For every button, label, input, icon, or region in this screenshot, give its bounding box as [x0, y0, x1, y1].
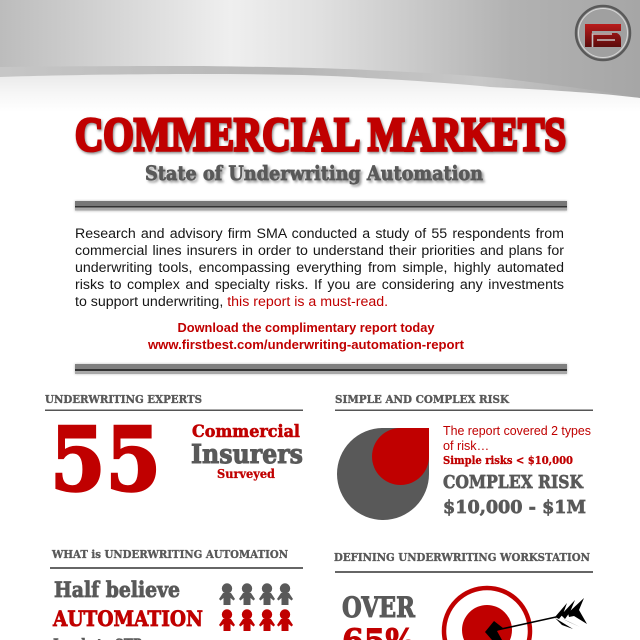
over: OVER — [342, 591, 416, 624]
risk text: $10,000 - $1M — [443, 497, 586, 518]
risk text — [443, 424, 591, 518]
subtitle: State of Underwriting Automation — [145, 161, 483, 185]
risk drop chart — [337, 428, 429, 520]
commercial insurers surveyed: Surveyed — [217, 466, 275, 481]
commercial insurers surveyed: Insurers — [191, 440, 303, 470]
icon: target with arrow — [444, 588, 587, 640]
risk text: Simple risks < $10,000 — [443, 454, 573, 467]
bottom divider — [75, 364, 567, 374]
intro paragraph: risks to complex and specialty risks. If you are considering any investments — [75, 277, 564, 293]
automation: AUTOMATION — [52, 607, 203, 632]
download call to action: www.firstbest.com/underwriting-automation-report — [147, 337, 465, 352]
half believe: Half believe — [54, 577, 180, 602]
panel: underwriting experts — [45, 392, 303, 512]
commercial insurers surveyed — [191, 422, 303, 481]
number 55: 55 — [50, 408, 161, 512]
header banner — [0, 0, 640, 112]
intro paragraph — [75, 226, 564, 310]
heading: simple and complex risk: SIMPLE AND COMPLEX RISK — [335, 392, 510, 406]
heading: underwriting experts: UNDERWRITING EXPERTS — [45, 392, 202, 406]
heading: what is underwriting automation: WHAT is UNDERWRITING AUTOMATION — [51, 547, 288, 561]
panel: simple and complex risk — [335, 392, 593, 520]
download call to action: Download the complimentary report today — [178, 320, 435, 335]
download call to action — [147, 320, 465, 352]
risk text: COMPLEX RISK — [443, 472, 584, 493]
top divider — [75, 201, 567, 211]
commercial insurers surveyed: Commercial — [192, 422, 301, 442]
logo — [576, 6, 630, 60]
risk text: The report covered 2 types — [443, 424, 591, 438]
people icons: red row — [219, 609, 293, 631]
heading: defining underwriting workstation: DEFINING UNDERWRITING WORKSTATION — [334, 550, 590, 564]
intro paragraph: underwriting tools, encompassing everything from simple, highly automated — [75, 260, 564, 276]
intro paragraph: to support underwriting, this report is a must-read. — [75, 294, 388, 310]
intro paragraph: Research and advisory firm SMA conducted a study of 55 respondents from — [75, 226, 564, 242]
people icons: gray row — [219, 583, 293, 605]
risk text: of risk… — [443, 439, 489, 453]
subtitle: State of Underwriting Automation — [147, 163, 485, 187]
intro paragraph: commercial lines insurers in order to understand their priorities and plans for — [75, 243, 564, 259]
panel: what is underwriting automation — [50, 547, 303, 640]
panel: defining underwriting workstation — [334, 550, 593, 640]
